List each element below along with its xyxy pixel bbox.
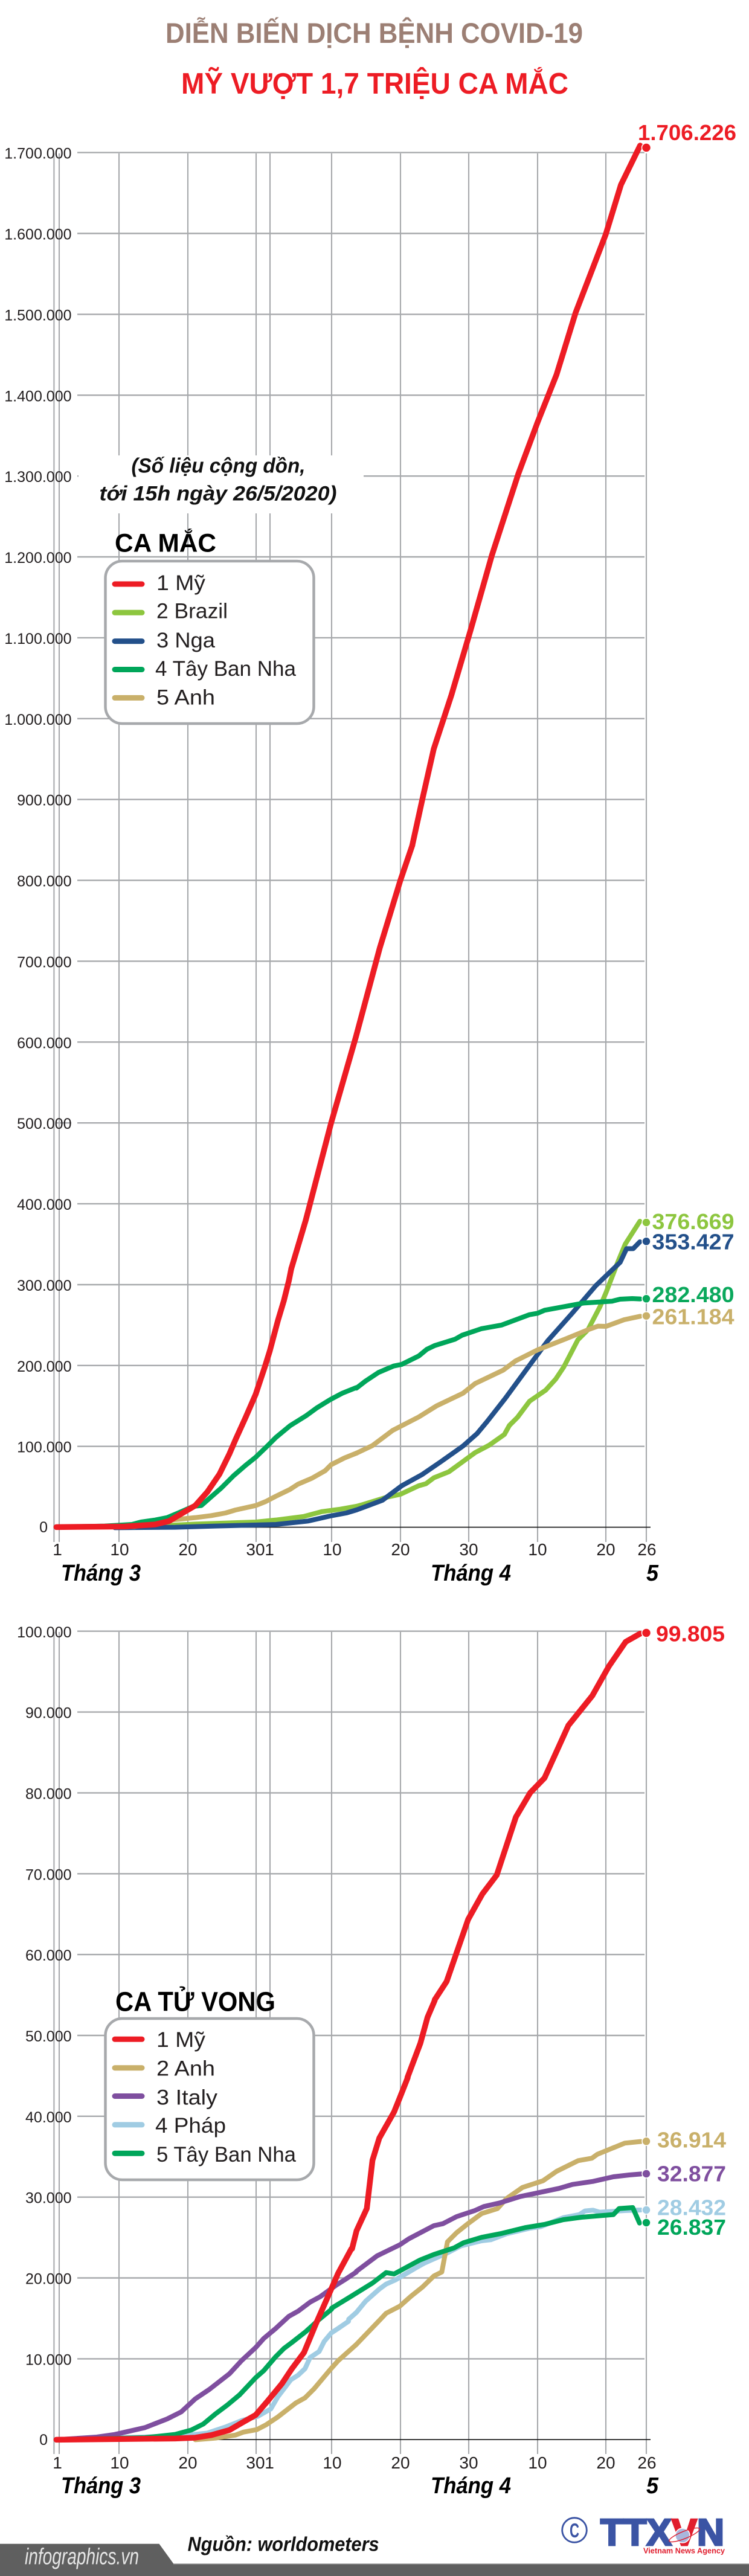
y axis labels: deaths	[17, 1624, 71, 2449]
logo: TTXVN	[562, 2512, 725, 2555]
y axis labels: deaths: 60.000	[25, 1947, 71, 1964]
x axis day labels: cases: 20	[391, 1540, 410, 1559]
y axis labels: cases: 0	[39, 1519, 48, 1536]
y axis labels: deaths: 20.000	[25, 2271, 71, 2288]
x axis month labels: deaths: Tháng 3	[61, 2473, 141, 2499]
y axis labels: cases: 500.000	[17, 1116, 71, 1132]
end value: Brazil: 376.669	[652, 1209, 735, 1234]
heading: disease progress: DIỄN BIẾN DỊCH BỆNH COVID-19	[166, 17, 583, 49]
note: cumulative data	[79, 455, 364, 513]
y axis labels: cases: 1.600.000	[4, 226, 71, 243]
y axis labels: deaths: 90.000	[25, 1705, 71, 1722]
line: UK	[195, 2142, 641, 2439]
y axis labels: cases: 1.400.000	[4, 388, 71, 405]
x axis day labels: deaths: 1	[53, 2453, 62, 2472]
y axis labels: cases: 200.000	[17, 1358, 71, 1375]
legend: deaths	[105, 2019, 314, 2180]
y axis labels: deaths: 100.000	[17, 1624, 71, 1641]
footer site name: infographics.vn	[25, 2545, 139, 2570]
y axis labels: cases: 800.000	[17, 873, 71, 890]
x axis day labels: cases: 10	[528, 1540, 547, 1559]
x axis month labels: cases: Tháng 4	[431, 1561, 511, 1586]
legend item: US: 1 Mỹ	[156, 571, 206, 595]
x axis day labels: deaths: 20	[391, 2453, 410, 2472]
y axis labels: cases: 300.000	[17, 1277, 71, 1294]
legend item: UK: 5 Anh	[156, 686, 215, 709]
end value: Russia: 353.427	[652, 1229, 735, 1254]
legend item: Spain: 4 Tây Ban Nha	[155, 657, 297, 681]
line: France	[56, 2210, 641, 2439]
x axis month labels: cases: Tháng 3	[61, 1561, 141, 1586]
x axis day labels: cases	[53, 1540, 657, 1559]
gridlines: cases	[54, 153, 651, 1542]
title block	[166, 17, 583, 100]
end value: Spain: 282.480	[652, 1282, 735, 1307]
legend item: UK: 2 Anh	[156, 2057, 215, 2081]
note: cumulative data: (Số liệu cộng dồn,	[132, 455, 306, 478]
x axis day labels: deaths: 1	[265, 2453, 274, 2472]
x axis day labels: deaths: 30	[246, 2453, 265, 2472]
end value: UK: 261.184	[652, 1304, 735, 1329]
x axis day labels: cases: 30	[246, 1540, 265, 1559]
legend item: US: 1 Mỹ	[156, 2028, 206, 2052]
y axis labels: deaths: 80.000	[25, 1785, 71, 1802]
y axis labels: cases: 1.000.000	[4, 711, 71, 728]
y axis labels: deaths: 50.000	[25, 2028, 71, 2045]
line: Spain	[56, 2208, 640, 2439]
legend item: Brazil: 2 Brazil	[156, 600, 228, 623]
heading: US passes 1.7 million: MỸ VƯỢT 1,7 TRIỆU CA MẮC	[181, 67, 568, 100]
x axis day labels: deaths: 26	[637, 2453, 657, 2472]
note: cumulative data: tới 15h ngày 26/5/2020)	[99, 483, 337, 506]
x axis day labels: cases: 30	[459, 1540, 478, 1559]
line: Italy	[56, 2174, 641, 2439]
y axis labels: cases: 1.100.000	[4, 631, 71, 647]
x axis day labels: cases: 20	[596, 1540, 616, 1559]
end value: Spain: 26.837	[657, 2215, 726, 2240]
legend item: Russia: 3 Nga	[156, 629, 216, 652]
x axis month labels: deaths	[61, 2473, 659, 2499]
x axis day labels: cases: 1	[53, 1540, 62, 1559]
y axis labels: deaths: 10.000	[25, 2351, 71, 2368]
gridlines: deaths	[54, 1631, 651, 2454]
legend: cases	[105, 561, 314, 724]
heading: cases: CA MẮC	[115, 528, 216, 557]
x axis day labels: deaths: 20	[596, 2453, 616, 2472]
y axis labels: cases: 900.000	[17, 792, 71, 809]
end value: France: 28.432	[657, 2195, 726, 2220]
x axis month labels: cases	[61, 1561, 659, 1586]
x axis day labels: deaths: 10	[323, 2453, 342, 2472]
y axis labels: cases: 1.700.000	[4, 146, 71, 162]
icon: copyright	[562, 2518, 587, 2542]
x axis month labels: cases: 5	[646, 1561, 659, 1586]
x axis day labels: deaths	[53, 2453, 657, 2472]
y axis labels: cases: 700.000	[17, 954, 71, 971]
end value: UK: 36.914	[657, 2127, 726, 2152]
y axis labels: cases: 600.000	[17, 1035, 71, 1052]
x axis day labels: cases: 26	[637, 1540, 657, 1559]
y axis labels: cases: 1.300.000	[4, 469, 71, 486]
end value: Italy: 32.877	[657, 2161, 726, 2186]
y axis labels: deaths: 70.000	[25, 1866, 71, 1883]
legend item: France: 4 Pháp	[155, 2114, 226, 2138]
footer band	[0, 2544, 749, 2576]
legend item: Italy: 3 Italy	[156, 2086, 218, 2110]
y axis labels: cases: 400.000	[17, 1196, 71, 1213]
y axis labels: cases	[4, 146, 71, 1536]
x axis day labels: deaths: 20	[178, 2453, 198, 2472]
x axis day labels: cases: 10	[323, 1540, 342, 1559]
x axis day labels: cases: 1	[265, 1540, 274, 1559]
end value: US: 1.706.226	[638, 120, 736, 145]
y axis labels: deaths: 30.000	[25, 2190, 71, 2207]
line: US	[56, 146, 640, 1527]
y axis labels: deaths: 40.000	[25, 2109, 71, 2126]
source note: Nguồn: worldometers	[188, 2533, 379, 2555]
icon: copyright: C	[570, 2519, 579, 2542]
chart: deaths	[17, 1621, 726, 2499]
y axis labels: cases: 100.000	[17, 1439, 71, 1456]
agency name: Vietnam News Agency	[643, 2546, 725, 2555]
x axis day labels: deaths: 10	[528, 2453, 547, 2472]
end value: US: 99.805	[656, 1621, 725, 1646]
x axis day labels: cases: 20	[178, 1540, 198, 1559]
heading: deaths: CA TỬ VONG	[115, 1986, 275, 2017]
legend item: Spain: 5 Tây Ban Nha	[156, 2143, 297, 2166]
wordmark: TTXVN	[600, 2512, 724, 2554]
y axis labels: deaths: 0	[39, 2432, 48, 2449]
line: Spain	[56, 1299, 640, 1527]
x axis day labels: deaths: 10	[110, 2453, 129, 2472]
line: Russia	[115, 1242, 640, 1527]
line: UK	[56, 1316, 640, 1527]
y axis labels: cases: 1.500.000	[4, 307, 71, 324]
chart: confirmed cases	[4, 120, 736, 1586]
x axis month labels: deaths: 5	[646, 2473, 659, 2499]
line: US	[56, 1634, 640, 2439]
line: Brazil	[135, 1221, 640, 1527]
x axis day labels: cases: 10	[110, 1540, 129, 1559]
y axis labels: cases: 1.200.000	[4, 550, 71, 567]
x axis day labels: deaths: 30	[459, 2453, 478, 2472]
x axis month labels: deaths: Tháng 4	[431, 2473, 511, 2499]
icon: globe	[668, 2525, 701, 2545]
